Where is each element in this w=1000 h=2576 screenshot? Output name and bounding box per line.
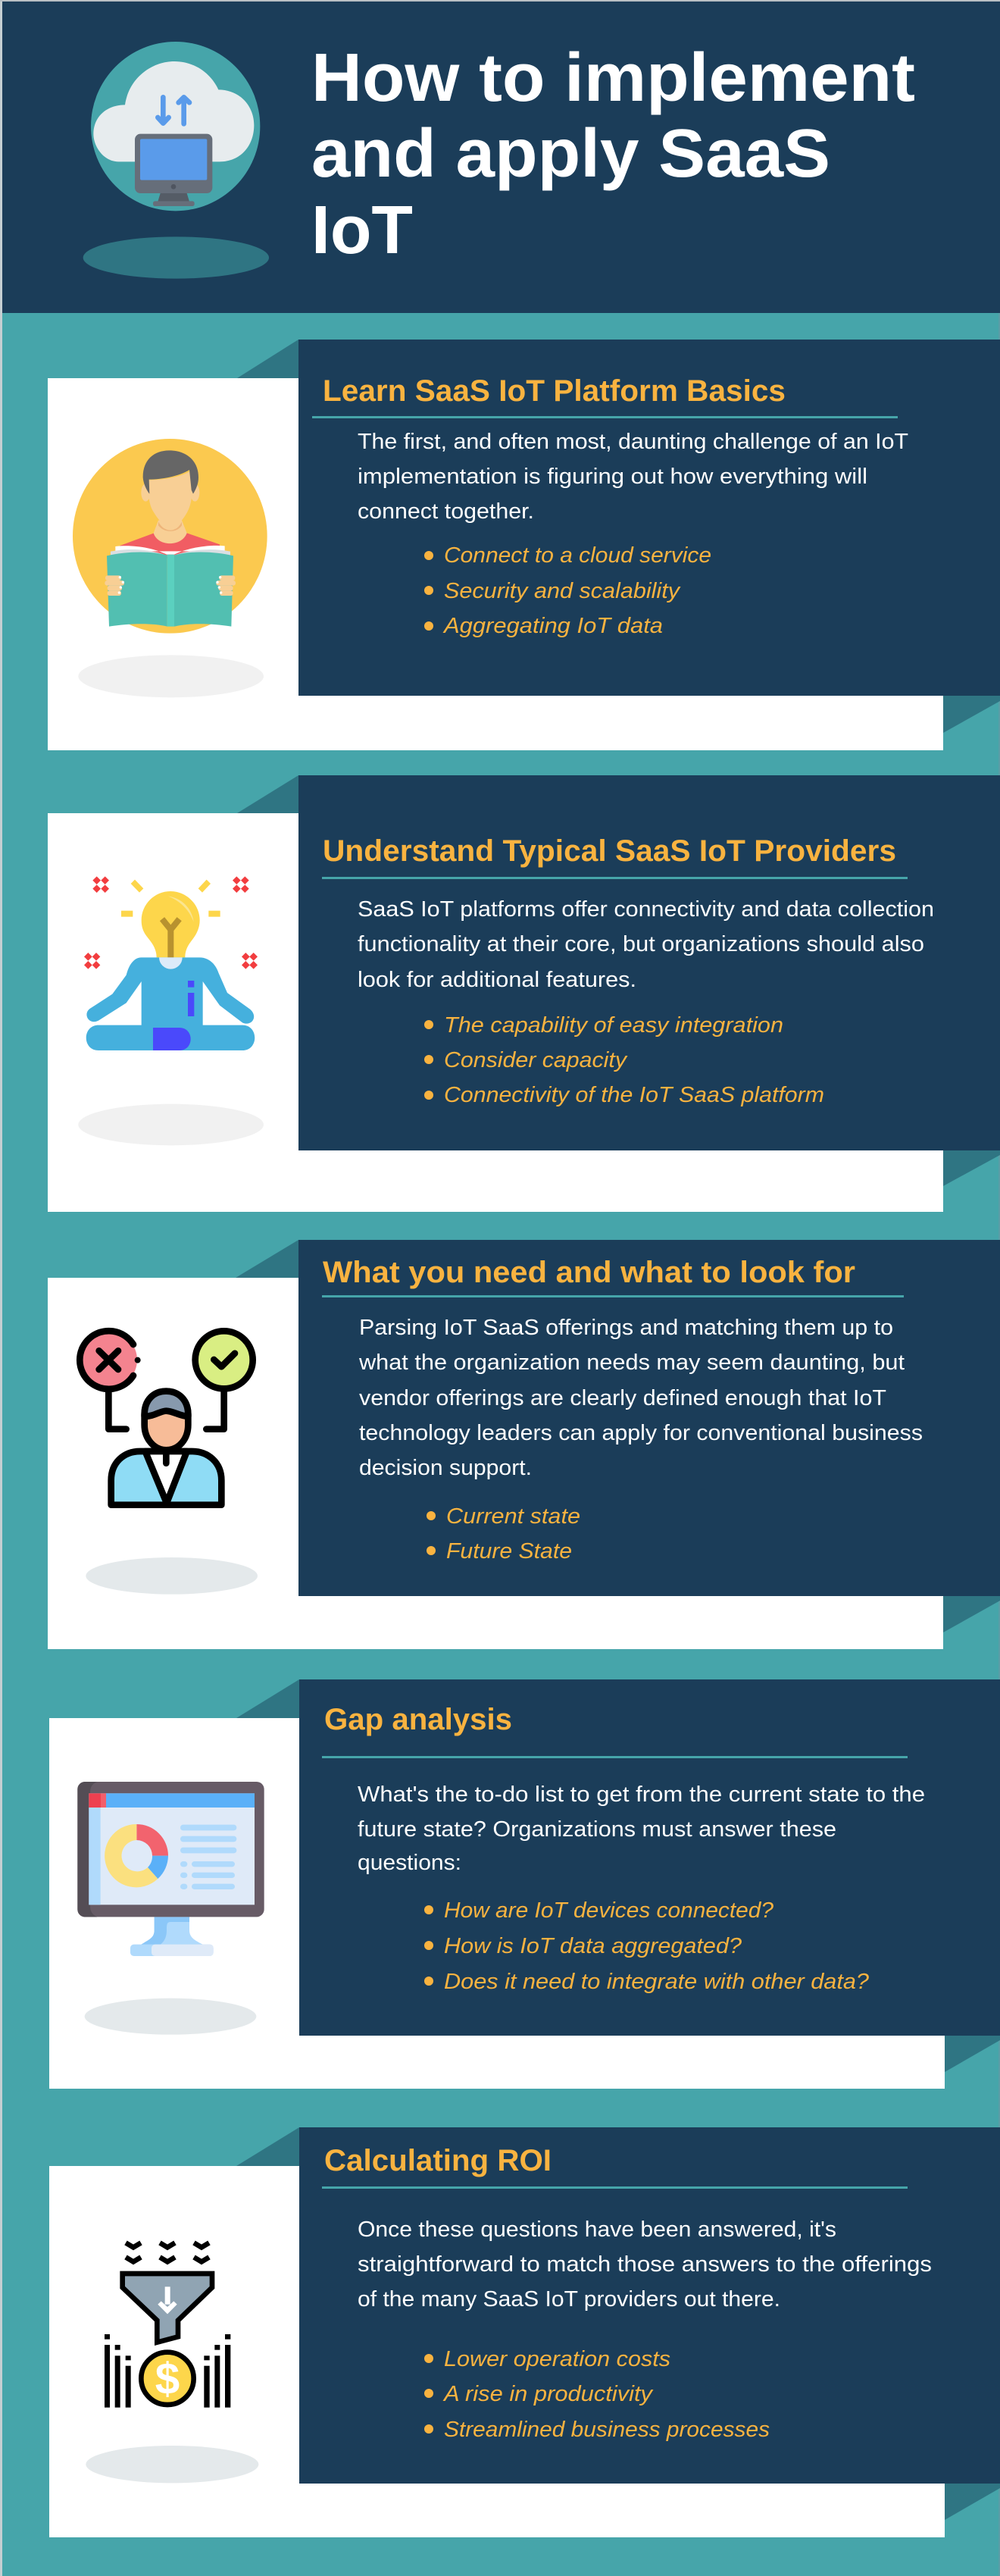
heading: Calculating ROI: [324, 2144, 552, 2177]
body text: [358, 897, 934, 992]
body text: implementation is figuring out how everything will: [358, 465, 867, 489]
bullet list: Current state: [446, 1504, 580, 1529]
panel: calculating ROI: [49, 2127, 1000, 2537]
body text: [358, 2218, 932, 2312]
icon: person reading a book: [73, 439, 267, 697]
bullet list: Connectivity of the IoT SaaS platform: [444, 1083, 824, 1107]
body text: technology leaders can apply for conventional business: [359, 1421, 923, 1445]
body text: future state? Organizations must answer these: [358, 1817, 836, 1842]
bullet list: Aggregating IoT data: [442, 614, 663, 638]
heading: What you need and what to look for: [323, 1256, 855, 1289]
icon: cloud and monitor: [83, 42, 269, 279]
body text: connect together.: [358, 499, 534, 524]
bullet list: [424, 2347, 770, 2442]
heading: Understand Typical SaaS IoT Providers: [323, 834, 896, 868]
panel: learn platform basics: [48, 340, 1000, 750]
icon: dashboard monitor: [77, 1782, 264, 2035]
bullet list: [424, 543, 711, 638]
title: and apply SaaS: [311, 116, 830, 192]
bullet list: Security and scalability: [444, 579, 681, 603]
body text: The first, and often most, daunting challenge of an IoT: [358, 430, 908, 454]
body text: questions:: [358, 1851, 461, 1875]
title: IoT: [311, 192, 413, 268]
body text: Parsing IoT SaaS offerings and matching them up to: [359, 1316, 893, 1340]
heading: Learn SaaS IoT Platform Basics: [323, 374, 786, 408]
bullet list: [424, 1898, 870, 1994]
bullet list: Consider capacity: [444, 1048, 628, 1072]
bullet list: Future State: [446, 1539, 572, 1563]
body text: decision support.: [359, 1456, 532, 1480]
body text: look for additional features.: [358, 968, 636, 992]
body text: What's the to-do list to get from the current state to the: [358, 1783, 925, 1807]
bullet list: Streamlined business processes: [444, 2418, 770, 2442]
body text: SaaS IoT platforms offer connectivity and data collection: [358, 897, 934, 922]
title: How to implement: [311, 40, 915, 116]
bullet list: [427, 1504, 580, 1563]
bullet list: [424, 1013, 824, 1107]
icon: funnel with coin: $: [155, 2354, 180, 2403]
bullet list: How is IoT data aggregated?: [444, 1934, 742, 1958]
panel: gap analysis: [49, 1679, 1000, 2089]
bullet list: How are IoT devices connected?: [444, 1898, 774, 1923]
bullet list: A rise in productivity: [442, 2382, 654, 2406]
body text: straightforward to match those answers to the offerings: [358, 2252, 932, 2277]
header band: [0, 0, 1000, 313]
bullet list: Lower operation costs: [444, 2347, 670, 2371]
bullet list: The capability of easy integration: [444, 1013, 783, 1038]
bullet list: Does it need to integrate with other data?: [444, 1970, 870, 1994]
body text: [358, 430, 908, 524]
body text: [358, 1783, 925, 1875]
body text: vendor offerings are clearly defined enough that IoT: [359, 1386, 886, 1410]
body text: of the many SaaS IoT providers out there.: [358, 2287, 780, 2312]
body text: [358, 1316, 923, 1480]
icon: meditating person with light bulb: [78, 876, 264, 1145]
body text: functionality at their core, but organizations should also: [358, 932, 924, 956]
heading: Gap analysis: [324, 1703, 512, 1736]
body text: Once these questions have been answered, it's: [358, 2218, 836, 2242]
icon: person choosing between cross and check: [80, 1331, 258, 1595]
panel: typical providers: [48, 775, 1000, 1212]
bullet list: Connect to a cloud service: [444, 543, 711, 568]
panel: what you need: [48, 1240, 1000, 1649]
icon: funnel with coin: [86, 2243, 258, 2483]
title: [311, 40, 915, 268]
body text: what the organization needs may seem daunting, but: [358, 1351, 905, 1375]
